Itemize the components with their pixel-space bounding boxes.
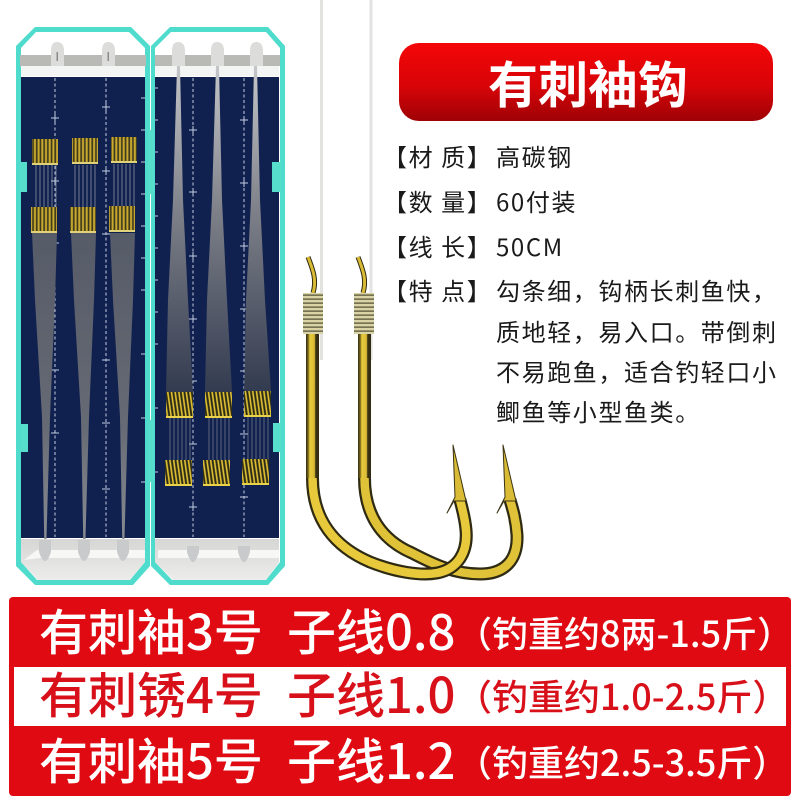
spec list	[383, 138, 778, 428]
right box rig 2	[203, 66, 232, 486]
right box ruler marks	[155, 88, 248, 511]
fishing line strands at top	[320, 0, 372, 360]
right box stitched guide lines	[193, 78, 244, 537]
size row: number 5	[39, 723, 788, 794]
spec: features: 勾条细，钩柄长刺鱼快，	[496, 272, 778, 307]
panel: right tackle box	[151, 27, 285, 585]
size row: number 4: 子线1.0	[287, 657, 455, 728]
spec: line length: 50CM	[496, 228, 564, 263]
panel: size table	[9, 594, 793, 796]
spec: features: 不易跑鱼，适合钓轻口小	[496, 353, 778, 388]
size row: number 4: 有刺锈4号	[39, 657, 263, 728]
left box rig 3	[109, 137, 137, 555]
left box ruler marks	[51, 98, 145, 489]
left box top clip bar	[20, 42, 146, 76]
icon: back fish hook	[354, 257, 517, 574]
spec: quantity: 60付装	[496, 183, 577, 218]
size row: number 3: 子线0.8	[287, 594, 455, 665]
size row: number 3: （钓重约8两-1.5斤）	[456, 606, 793, 658]
right box side clips	[272, 162, 281, 452]
spec: features	[383, 272, 778, 428]
left box navy felt	[21, 77, 145, 538]
spec: line length: 【线 长】	[383, 228, 492, 263]
right box rig 1	[165, 66, 193, 486]
spec: features: 鲫鱼等小型鱼类。	[496, 393, 701, 428]
spec: quantity: 【数 量】	[383, 183, 492, 218]
size row: number 3: 有刺袖3号	[39, 594, 263, 665]
left box rig 1	[31, 139, 58, 555]
icon: front fish hook	[303, 257, 466, 574]
size row: number 5: （钓重约2.5-3.5斤）	[456, 735, 788, 787]
size row: number 5: 有刺袖5号	[39, 723, 263, 794]
right box bottom tray	[155, 539, 279, 580]
left box bottom tray	[21, 539, 145, 580]
spec: features: 质地轻，易入口。带倒刺	[496, 313, 778, 348]
panel: left tackle box	[16, 27, 150, 585]
size row: number 4	[39, 657, 788, 728]
spec: material: 高碳钢	[496, 138, 573, 173]
size row: number 4: （钓重约1.0-2.5斤）	[456, 669, 788, 721]
right box navy felt	[155, 77, 279, 538]
right box top clip bar	[155, 42, 280, 76]
size row: number 5: 子线1.2	[287, 723, 455, 794]
spec: material: 【材 质】	[383, 138, 492, 173]
title banner	[399, 43, 773, 121]
size row: number 3	[39, 594, 793, 665]
spec: material	[383, 138, 573, 173]
left box stitched guide lines	[55, 78, 106, 537]
spec: line length	[383, 228, 564, 263]
right box rig 3	[242, 66, 271, 485]
left box side clips	[20, 162, 28, 452]
title text: 有刺袖钩	[488, 46, 688, 118]
left box rig 2	[70, 138, 98, 555]
box hinges	[148, 130, 154, 482]
spec: features: 【特 点】	[383, 272, 492, 307]
spec: quantity	[383, 183, 577, 218]
